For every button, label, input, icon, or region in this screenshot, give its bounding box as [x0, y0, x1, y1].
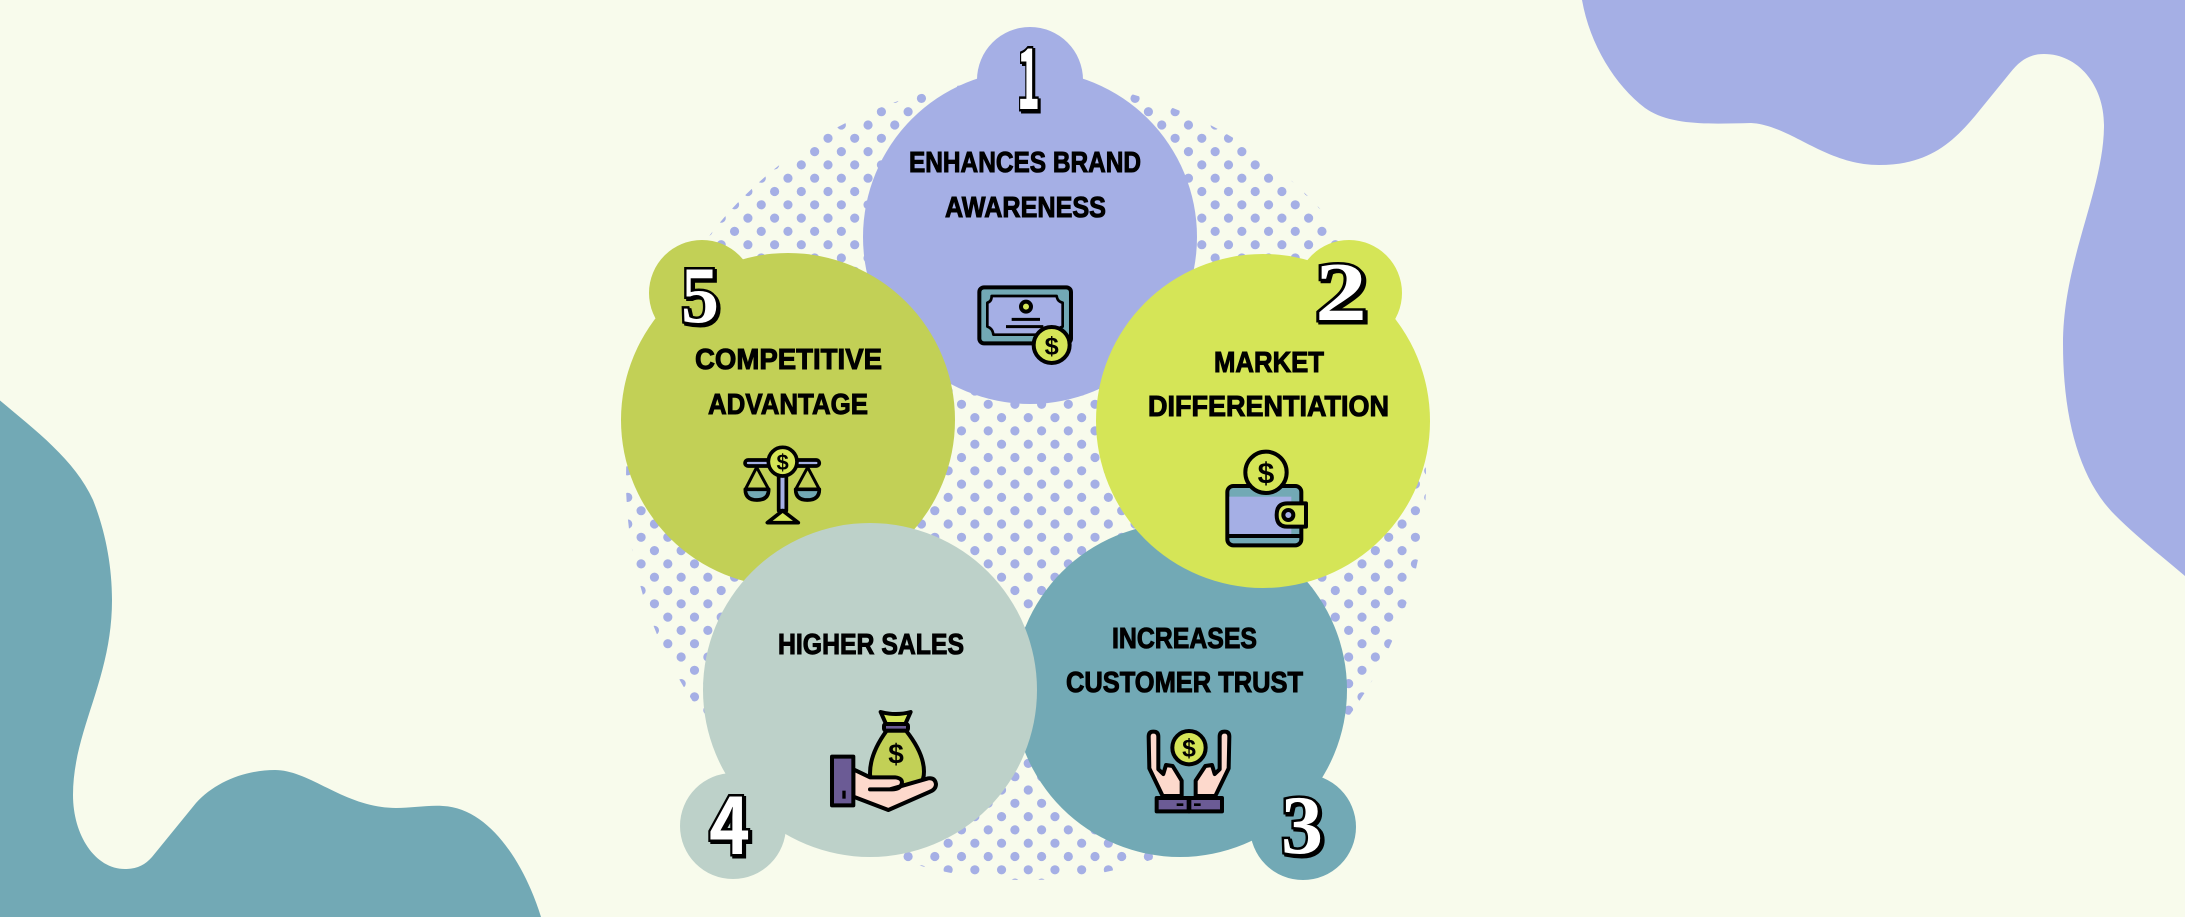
heading 5: [695, 344, 882, 421]
icon: wallet with coin: [1227, 452, 1306, 545]
heading 3: [1066, 623, 1303, 699]
icon: wallet with coin: $: [1258, 457, 1275, 490]
heading 4: HIGHER SALES: [778, 629, 964, 661]
decorative blob: top right: [1582, 0, 2185, 576]
heading 2: DIFFERENTIATION: [1148, 391, 1389, 423]
heading 1: [909, 147, 1141, 224]
number 2: 2: [1315, 246, 1367, 339]
dotted background circle: [601, 85, 1440, 883]
panel: 2 market differentiation: [1096, 240, 1430, 588]
panel: 1 enhances brand awareness: [863, 13, 1197, 404]
icon: hands holding coin: [1149, 731, 1229, 811]
heading 2: [1148, 347, 1389, 423]
heading 1: AWARENESS: [945, 192, 1106, 224]
icon: hands holding coin: $: [1182, 736, 1196, 763]
bubble 4: [680, 523, 1037, 879]
icon: balance scales: $: [777, 450, 789, 475]
bubble 3: [1013, 523, 1356, 880]
number 4: 4: [709, 762, 750, 878]
heading 5: COMPETITIVE: [695, 344, 882, 376]
bubble 5: [621, 240, 955, 587]
icon: banknote with coin: $: [1045, 332, 1059, 360]
decorative blob: bottom left: [0, 400, 541, 917]
number 3: 3: [1281, 779, 1323, 872]
panel: 1 enhances brand awareness: 1: [1017, 13, 1040, 134]
panel: 3 increases customer trust: [1013, 523, 1356, 880]
icon: hand holding money bag: $: [888, 738, 904, 769]
heading 2: MARKET: [1214, 347, 1324, 379]
heading 3: INCREASES: [1112, 623, 1257, 655]
bubble 2: [1096, 240, 1430, 588]
heading 1: ENHANCES BRAND: [909, 147, 1141, 179]
icon: banknote with coin: [979, 287, 1071, 363]
icon: hand holding money bag: [832, 712, 936, 810]
icon: balance scales: [745, 447, 819, 523]
heading 3: CUSTOMER TRUST: [1066, 667, 1303, 699]
panel: 4 higher sales: [680, 523, 1037, 879]
number 5: 5: [681, 252, 719, 340]
panel: 5 competitive advantage: [621, 240, 955, 587]
heading 5: ADVANTAGE: [708, 389, 868, 421]
bubble 1: [863, 27, 1197, 404]
